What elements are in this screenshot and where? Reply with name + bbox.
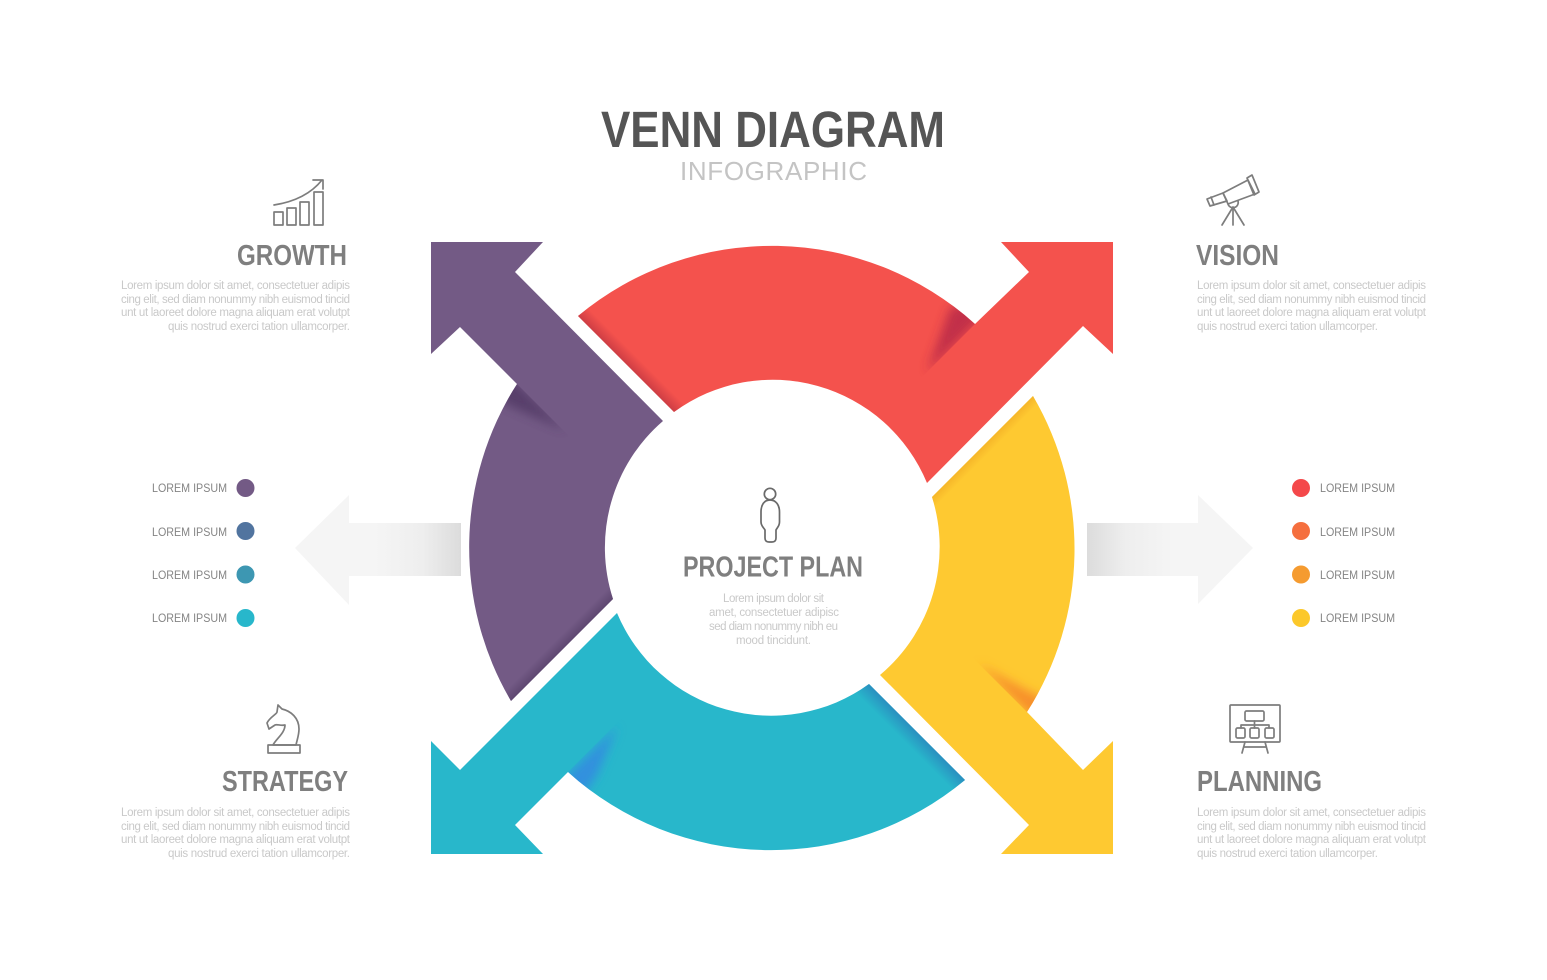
text: vision: quis nostrud exerci tation ullamcorper. — [1197, 321, 1378, 333]
icon: chess knight — [267, 705, 300, 753]
legend: left: LOREM IPSUM — [152, 611, 227, 625]
legend: right: LOREM IPSUM — [1320, 481, 1395, 495]
center heading: PROJECT PLAN — [683, 552, 863, 584]
text: planning: unt ut laoreet dolore magna aliquam erat volutpt — [1197, 834, 1427, 846]
legend: right: LOREM IPSUM — [1320, 611, 1395, 625]
center text: mood tincidunt. — [736, 635, 811, 647]
heading: growth: GROWTH — [237, 240, 347, 272]
icon: person — [761, 488, 780, 542]
text: growth: unt ut laoreet dolore magna aliquam erat volutpt — [121, 307, 351, 319]
heading: strategy: STRATEGY — [222, 766, 348, 798]
left grey arrow — [295, 495, 461, 605]
text: planning: cing elit, sed diam nonummy nibh euismod tincid — [1197, 821, 1426, 833]
text: strategy: cing elit, sed diam nonummy nibh euismod tincid — [121, 821, 350, 833]
infographic canvas — [122, 111, 1426, 860]
text: growth: cing elit, sed diam nonummy nibh euismod tincid — [121, 294, 350, 306]
segment: yellow arrow — [880, 396, 1113, 854]
segment: red arrow — [578, 242, 1113, 483]
heading: planning: PLANNING — [1197, 766, 1322, 798]
legend: right: LOREM IPSUM — [1320, 525, 1395, 539]
icon: planning board — [1230, 705, 1280, 753]
center text: sed diam nonummy nibh eu — [709, 621, 838, 633]
text: planning: quis nostrud exerci tation ullamcorper. — [1197, 848, 1378, 860]
subtitle: INFOGRAPHIC — [680, 156, 867, 186]
icon: telescope — [1207, 175, 1259, 225]
right grey arrow — [1087, 495, 1253, 604]
icon: growth chart — [274, 180, 323, 225]
text: strategy — [121, 807, 351, 860]
center text — [709, 593, 839, 647]
center text: amet, consectetuer adipisc — [709, 607, 839, 619]
legend: left — [152, 479, 254, 627]
text: vision: cing elit, sed diam nonummy nibh euismod tincid — [1197, 294, 1426, 306]
title: VENN DIAGRAM — [601, 101, 945, 158]
legend: left: LOREM IPSUM — [152, 481, 227, 495]
text: vision: Lorem ipsum dolor sit amet, consectetuer adipis — [1197, 280, 1426, 292]
text: strategy: unt ut laoreet dolore magna aliquam erat volutpt — [121, 834, 351, 846]
text: growth: quis nostrud exerci tation ullamcorper. — [168, 321, 350, 333]
text: strategy: quis nostrud exerci tation ullamcorper. — [168, 848, 350, 860]
text: planning — [1197, 807, 1427, 860]
legend: right — [1292, 479, 1395, 627]
legend: left: LOREM IPSUM — [152, 568, 227, 582]
text: growth — [121, 280, 351, 333]
segment: purple arrow — [431, 242, 663, 701]
segment: teal arrow — [431, 613, 965, 854]
legend: right: LOREM IPSUM — [1320, 568, 1395, 582]
text: vision — [1197, 280, 1427, 333]
center text: Lorem ipsum dolor sit — [723, 593, 825, 605]
text: strategy: Lorem ipsum dolor sit amet, consectetuer adipis — [121, 807, 350, 819]
text: vision: unt ut laoreet dolore magna aliquam erat volutpt — [1197, 307, 1427, 319]
text: growth: Lorem ipsum dolor sit amet, consectetuer adipis — [121, 280, 350, 292]
text: planning: Lorem ipsum dolor sit amet, consectetuer adipis — [1197, 807, 1426, 819]
heading: vision: VISION — [1196, 240, 1279, 272]
legend: left: LOREM IPSUM — [152, 525, 227, 539]
